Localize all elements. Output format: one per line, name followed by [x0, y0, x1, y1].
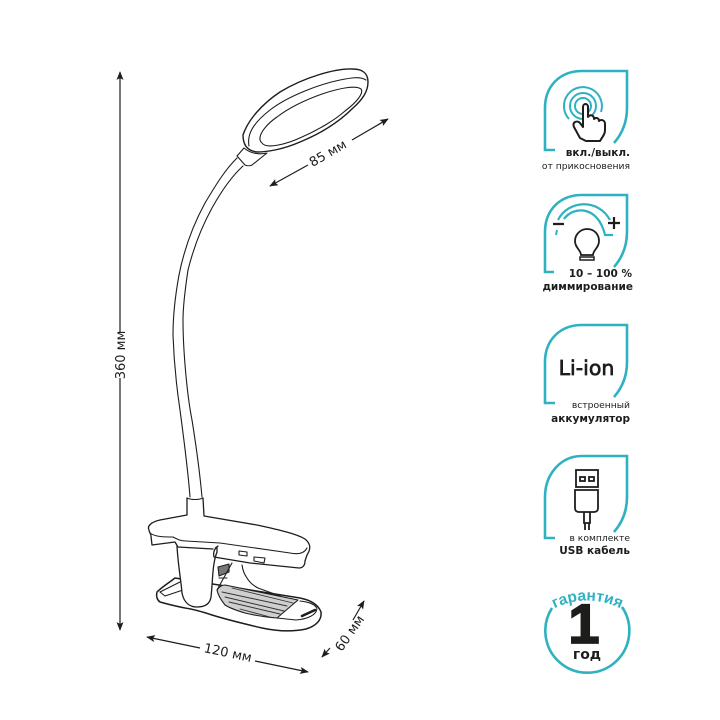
sublabel: встроенный: [572, 400, 630, 411]
head diameter dimension: 85 mm: 85 мм: [307, 137, 349, 171]
lamp illustration: [148, 69, 368, 631]
badge ring: [545, 607, 629, 673]
icon: USB plug: [575, 470, 598, 530]
spring: [218, 564, 229, 576]
sublabel: в комплекте: [569, 533, 630, 544]
icon frame: [545, 71, 627, 150]
base length dimension: 120 mm: 120 мм: [202, 641, 253, 666]
warranty badge: [544, 592, 631, 674]
feature: USB cable: [545, 456, 630, 557]
head diameter dimension: 85 mm: [270, 119, 388, 186]
icon frame: [545, 325, 627, 403]
label: аккумулятор: [551, 413, 630, 425]
base length dimension: 120 mm: [147, 637, 308, 672]
icon: touch hand: [564, 87, 605, 141]
label: вкл./выкл.: [566, 147, 630, 159]
clip base: [148, 498, 321, 631]
label: 10 – 100 %: [569, 268, 632, 280]
clip arm: [177, 546, 217, 607]
head collar: [237, 148, 267, 166]
icon frame: [545, 456, 627, 538]
USB port: [239, 551, 247, 556]
icon frame: [545, 195, 627, 272]
upper jaw: [148, 498, 310, 569]
lamp head ring: [243, 69, 368, 152]
feature: touch switch: [542, 71, 630, 172]
curved label: [553, 600, 622, 609]
textured clip pad: [217, 585, 298, 618]
feature: Li-ion battery: [545, 325, 630, 425]
feature: dimming: [542, 195, 633, 293]
base width dimension: 60 mm: 60 мм: [333, 613, 368, 655]
icon: dimming arc: [553, 204, 620, 260]
height dimension: 360 mm: 360 мм: [114, 331, 129, 379]
Li-ion text: Li-ion: [559, 356, 614, 380]
unit: год: [573, 647, 601, 663]
warranty badge: гарантия: [552, 592, 623, 608]
label: USB кабель: [559, 545, 630, 557]
power port: [254, 557, 265, 563]
base width dimension: 60 mm: [322, 601, 368, 657]
sublabel: от прикосновения: [542, 161, 630, 172]
sublabel: диммирование: [542, 281, 633, 293]
number: 1: [568, 592, 600, 655]
lower jaw: [157, 578, 321, 631]
gooseneck: [173, 158, 243, 497]
